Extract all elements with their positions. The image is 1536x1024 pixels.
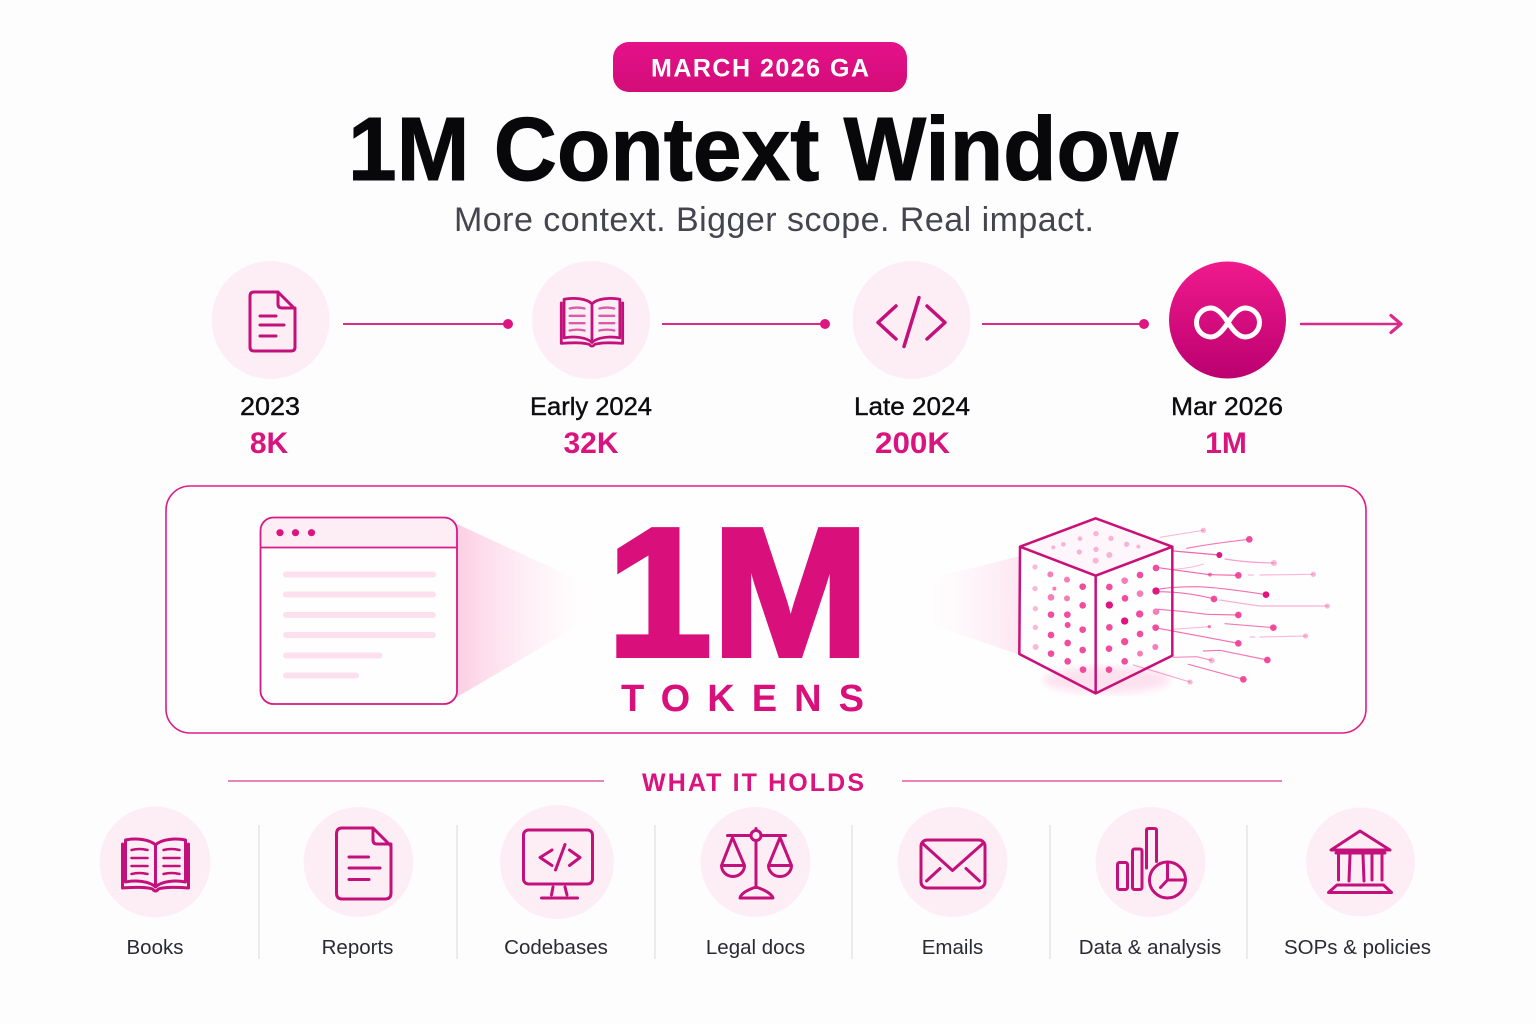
big number: 1M xyxy=(607,490,869,694)
item: SOPs & policies xyxy=(1284,808,1431,959)
timeline step: Mar 2026 1M: 1M xyxy=(1205,427,1247,460)
timeline step: Early 2024 32K xyxy=(530,261,652,460)
item: Books: Books xyxy=(127,936,183,959)
item: Legal docs xyxy=(700,807,810,959)
tokens label: TOKENS xyxy=(621,678,864,720)
item: Codebases xyxy=(500,805,614,959)
arrow xyxy=(1301,316,1401,332)
timeline step: Early 2024 32K: Early 2024 xyxy=(530,393,652,421)
timeline step: Mar 2026 1M xyxy=(1169,262,1286,460)
connector 2 xyxy=(662,319,830,329)
timeline step: Late 2024 200K: Late 2024 xyxy=(854,393,970,421)
item: Reports: Reports xyxy=(322,936,393,959)
item: Codebases: Codebases xyxy=(504,936,608,959)
item: Reports xyxy=(304,807,414,959)
item: Books xyxy=(100,806,210,959)
category row xyxy=(100,805,1431,959)
timeline step: Mar 2026 1M: Mar 2026 xyxy=(1171,393,1283,421)
icon: browser window xyxy=(260,518,457,704)
item: Data & analysis xyxy=(1079,807,1221,959)
section heading: what it holds: WHAT IT HOLDS xyxy=(642,769,864,797)
funnel from window xyxy=(457,524,585,697)
funnel into cube xyxy=(925,556,1020,655)
timeline step: 2023 8K xyxy=(212,261,330,460)
item: SOPs & policies: SOPs & policies xyxy=(1284,936,1431,959)
icon: data cube xyxy=(1019,518,1330,693)
connector 1 xyxy=(343,319,513,329)
data streams xyxy=(1133,530,1327,682)
timeline step: Late 2024 200K: 200K xyxy=(875,427,950,460)
title: 1M Context Window xyxy=(348,100,1179,200)
particles xyxy=(1032,528,1330,685)
item: Data & analysis: Data & analysis xyxy=(1079,936,1221,959)
timeline step: Late 2024 200K xyxy=(852,261,970,460)
timeline xyxy=(212,261,1401,460)
timeline step: 2023 8K: 2023 xyxy=(240,393,300,421)
item: Emails xyxy=(898,807,1008,959)
badge: March 2026 GA: MARCH 2026 GA xyxy=(651,54,869,82)
panel: 1M tokens xyxy=(166,486,1366,733)
connector 3 xyxy=(982,319,1149,329)
item: Legal docs: Legal docs xyxy=(706,936,805,959)
subtitle: More context. Bigger scope. Real impact. xyxy=(454,201,1094,239)
timeline step: Early 2024 32K: 32K xyxy=(563,427,619,460)
cube frame xyxy=(1019,518,1172,693)
badge: March 2026 GA xyxy=(613,42,907,92)
item: Emails: Emails xyxy=(922,936,983,959)
timeline step: 2023 8K: 8K xyxy=(250,427,289,460)
